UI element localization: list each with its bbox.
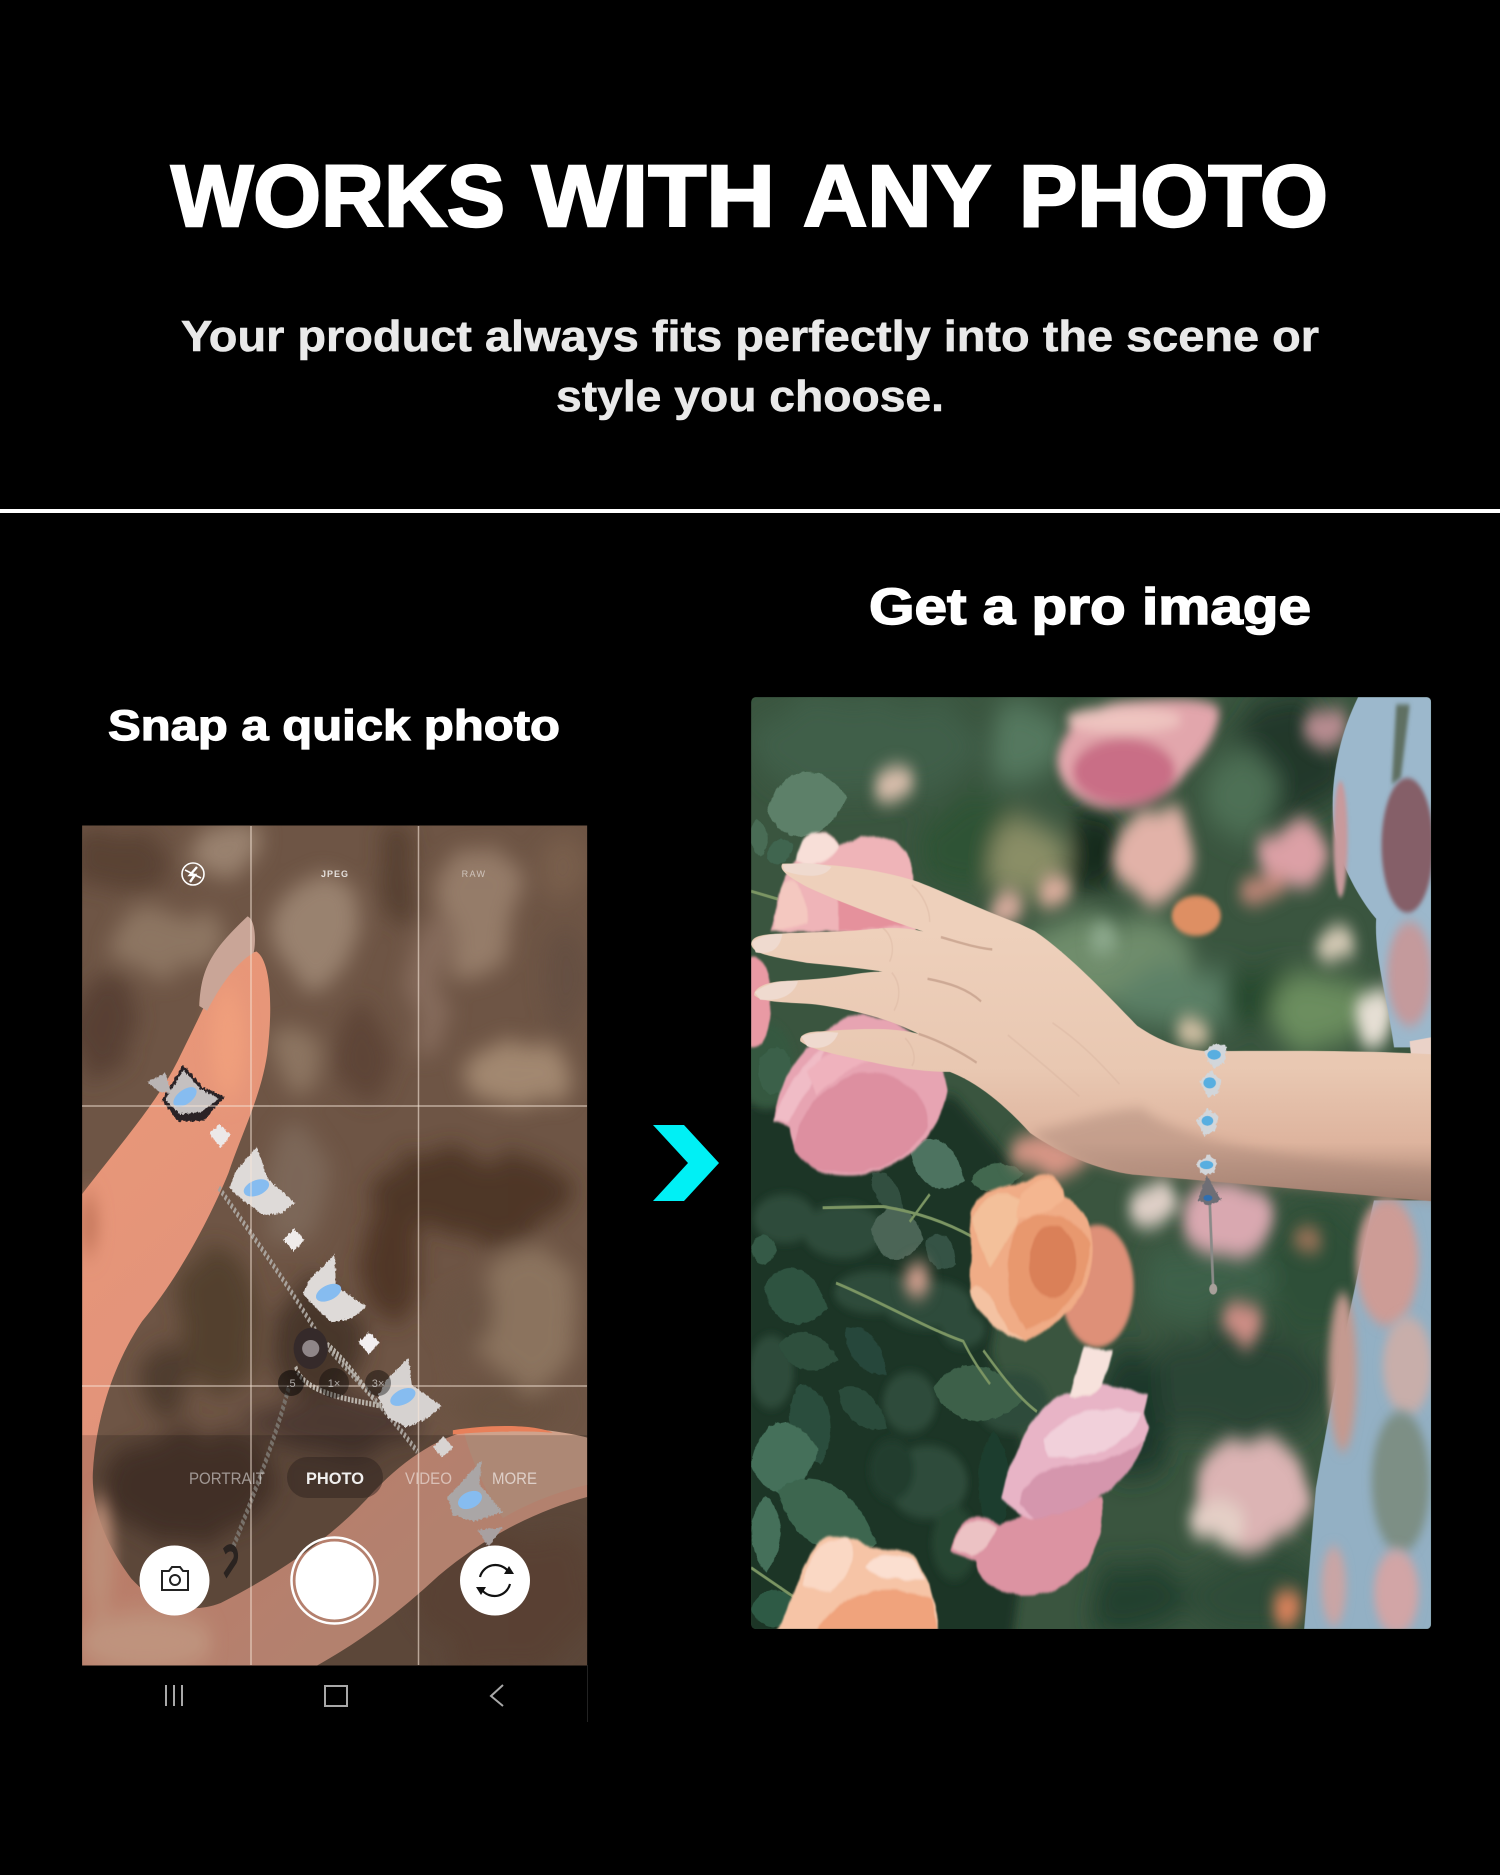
icon: gallery camera button (140, 1546, 210, 1616)
photo: hand holding bracelet (82, 826, 588, 1666)
heading: snap a quick photo: Snap a quick photo (108, 702, 560, 750)
title: WORKS (171, 148, 505, 245)
roses (736, 699, 1220, 1635)
hand and arm (751, 863, 1436, 1202)
title: PHOTO (1019, 148, 1328, 245)
icon: flip camera button (460, 1546, 530, 1616)
peach bud (1172, 896, 1221, 936)
camera mode selector: VIDEO (405, 1469, 452, 1488)
divider (0, 509, 1500, 513)
zoom selector: 3× (372, 1378, 384, 1390)
blurred mid-layer leaves (740, 1023, 1048, 1580)
lower strip shade (82, 1435, 587, 1665)
label: RAW: RAW (462, 869, 486, 879)
dark foliage (752, 1090, 1022, 1629)
panel: pro image photo (751, 697, 1432, 1629)
rear peach rose (1061, 1225, 1134, 1347)
zoom selector: 1× (328, 1378, 340, 1390)
arrow (653, 1125, 719, 1201)
zoom selector (278, 1368, 391, 1398)
finger and thumb (82, 952, 587, 1665)
bracelet (147, 1064, 503, 1576)
icon: shutter button (292, 1538, 378, 1624)
rose stems (751, 891, 1037, 1601)
camera mode selector (189, 1457, 537, 1498)
dress (1302, 692, 1454, 1660)
camera grid lines (82, 826, 587, 1665)
phone navigation bar (166, 1665, 588, 1722)
worn bracelet (1196, 1044, 1227, 1295)
subtitle (181, 312, 1319, 421)
fingernails (199, 916, 255, 1011)
icon: flash off (182, 863, 204, 885)
title (171, 148, 1328, 245)
blurred roses (878, 700, 1391, 1626)
camera mode selector: MORE (492, 1469, 537, 1488)
heading: get a pro image: Get a pro image (869, 578, 1311, 635)
subtitle: style you choose. (556, 372, 944, 421)
title: ANY (803, 148, 991, 245)
label: JPEG: JPEG (321, 869, 349, 879)
zoom selector: .5 (286, 1378, 296, 1390)
camera mode selector: PHOTO (306, 1469, 364, 1488)
panel: phone camera photo (82, 826, 588, 1722)
leaves (746, 764, 1025, 1627)
blurred garden background (749, 695, 1374, 1635)
title: WITH (532, 148, 775, 245)
subtitle: Your product always fits perfectly into the scene or (181, 312, 1319, 361)
camera mode selector: PORTRAIT (189, 1469, 265, 1488)
